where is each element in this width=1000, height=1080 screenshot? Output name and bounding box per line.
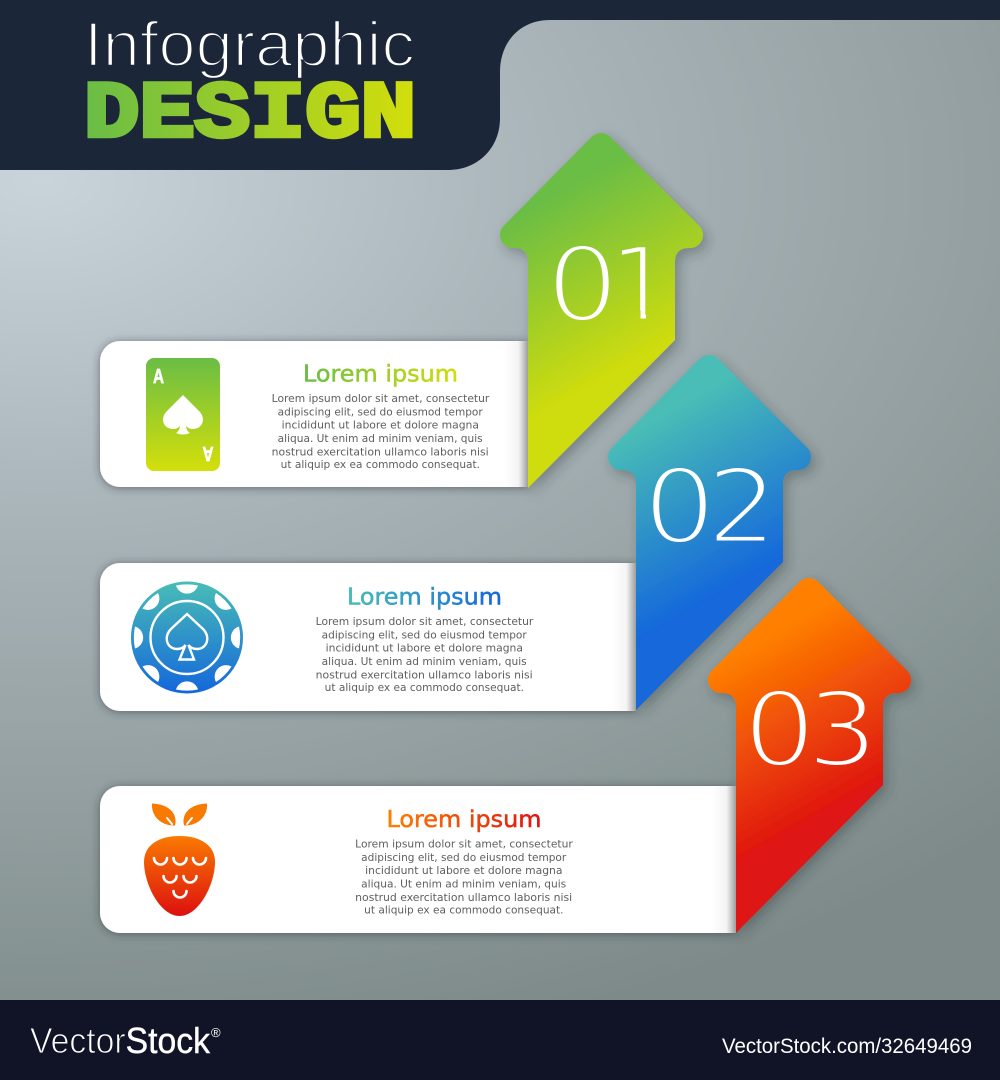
arrow 2	[608, 355, 811, 710]
body text: Lorem ipsum dolor sit amet, consectetur	[316, 616, 534, 628]
body text: incididunt ut labore et dolore magna	[282, 420, 479, 432]
heading: Lorem ipsum	[386, 807, 542, 833]
card 2	[100, 563, 636, 711]
arrow 3	[708, 578, 911, 933]
number 01: 0	[546, 224, 619, 346]
step 3 text	[355, 807, 574, 917]
icon: strawberry	[144, 804, 215, 916]
body text: ut aliquip ex ea commodo consequat.	[281, 459, 480, 471]
body text: Lorem ipsum dolor sit amet, consectetur	[355, 838, 574, 850]
body text: incididunt ut labore et dolore magna	[365, 865, 562, 877]
icon: ace of spades card: A	[202, 442, 214, 464]
step 2 text	[316, 585, 534, 694]
number 02: 2	[706, 446, 778, 568]
card 3	[100, 786, 736, 933]
panel: step 1	[100, 133, 703, 488]
number 02	[643, 446, 778, 568]
number 01: 1	[608, 224, 674, 346]
body text: adipiscing elit, sed do eiusmod tempor	[322, 629, 527, 641]
panel: step 3	[100, 578, 911, 933]
number 03	[743, 669, 878, 791]
icon: ace of spades card: A	[153, 366, 164, 388]
body text: nostrud exercitation ullamco laboris nisi	[272, 446, 489, 458]
body text: aliqua. Ut enim ad minim veniam, quis	[361, 878, 566, 890]
footer bar	[0, 1000, 1000, 1080]
watermark url: VectorStock.com/32649469	[722, 1035, 972, 1058]
body text: ut aliquip ex ea commodo consequat.	[325, 682, 524, 694]
number 02: 0	[643, 446, 716, 568]
icon: ace of spades card	[146, 358, 220, 471]
body text: nostrud exercitation ullamco laboris nisi	[355, 892, 572, 904]
card 1	[100, 341, 528, 487]
body text: incididunt ut labore et dolore magna	[326, 643, 523, 655]
heading: Lorem ipsum	[303, 362, 458, 388]
step 1 text	[272, 362, 490, 471]
arrow 1	[500, 133, 703, 488]
watermark logo: VectorStock	[30, 1020, 211, 1061]
panel: step 2	[100, 355, 811, 711]
title: Infographic: Infographic	[84, 10, 415, 80]
number 03: 0	[743, 669, 816, 791]
title: DESIGN: DESIGN	[84, 70, 416, 161]
body text	[316, 616, 534, 694]
body text: ut aliquip ex ea commodo consequat.	[364, 905, 564, 917]
body text: nostrud exercitation ullamco laboris nisi	[316, 669, 533, 681]
icon: casino chip	[131, 582, 243, 694]
body text: aliqua. Ut enim ad minim veniam, quis	[278, 433, 483, 445]
body text: adipiscing elit, sed do eiusmod tempor	[361, 852, 567, 864]
header panel	[0, 0, 1000, 170]
body text: Lorem ipsum dolor sit amet, consectetur	[272, 393, 490, 405]
number 01	[546, 224, 674, 346]
heading: Lorem ipsum	[347, 585, 502, 611]
registered mark: ®	[211, 1025, 221, 1040]
body text	[272, 393, 490, 471]
body text: aliqua. Ut enim ad minim veniam, quis	[322, 656, 527, 668]
body text: adipiscing elit, sed do eiusmod tempor	[278, 406, 483, 418]
number 03: 3	[806, 669, 878, 791]
body text	[355, 838, 574, 917]
